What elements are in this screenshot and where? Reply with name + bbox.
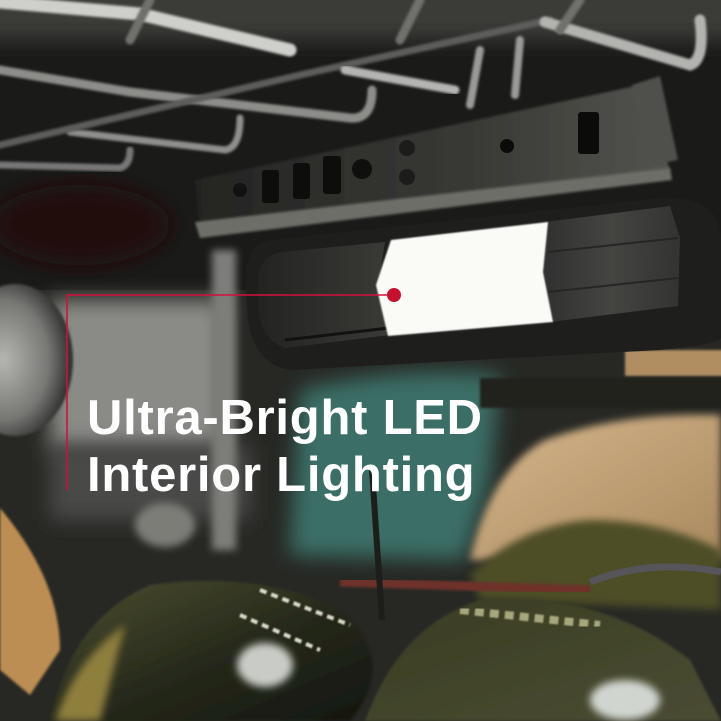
green glass bowls bbox=[0, 470, 721, 721]
upper area bbox=[0, 0, 721, 300]
title: Interior Lighting bbox=[87, 448, 475, 502]
title: Ultra-Bright LED bbox=[87, 391, 483, 445]
LED light bbox=[376, 222, 553, 336]
wire rack bbox=[0, 0, 701, 168]
metal rail with slots bbox=[195, 76, 678, 238]
lower background bbox=[0, 250, 721, 721]
light housing bbox=[245, 198, 721, 370]
